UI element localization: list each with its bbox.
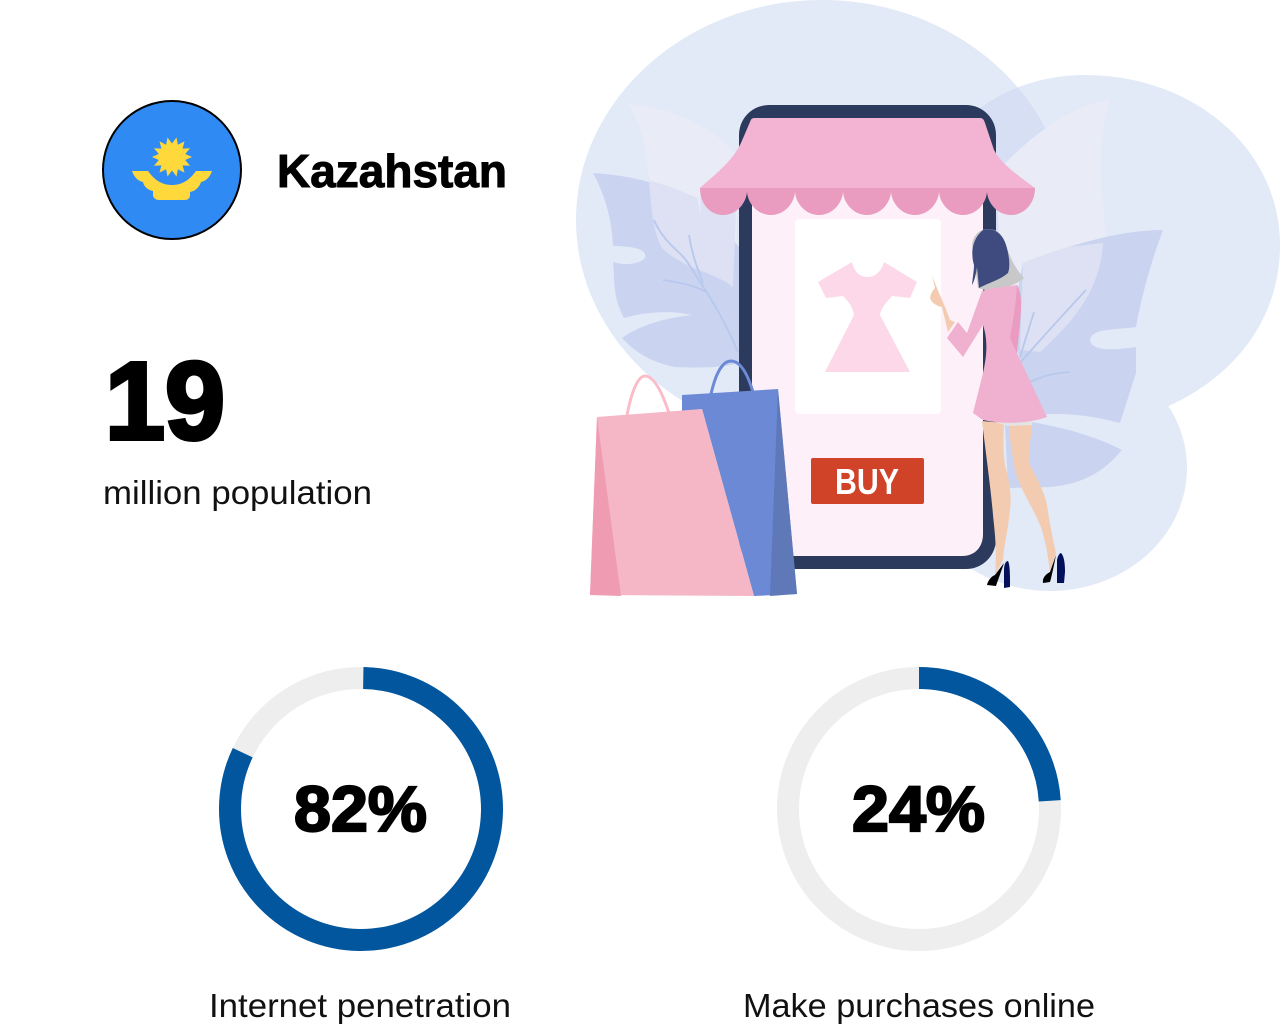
leaf: top left translucent [627, 104, 738, 290]
leaf: right lavender [1010, 230, 1163, 423]
slip [983, 418, 1033, 426]
leaf: lower right lavender [1005, 422, 1122, 488]
hair back [972, 229, 1024, 290]
panel: country header [103, 101, 507, 239]
product card [795, 219, 941, 414]
value: 82%: 82% [294, 773, 427, 845]
shopping bag: pink [590, 376, 754, 596]
awning [700, 118, 1035, 215]
icon: dress [818, 262, 917, 372]
chart: internet penetration donut [209, 676, 511, 1024]
chart: online purchases donut [743, 678, 1095, 1024]
leaf: right overlap [1020, 243, 1103, 352]
buy button [811, 458, 924, 504]
shoes [1004, 561, 1010, 588]
hair [972, 229, 1009, 288]
buy button: BUY [835, 461, 899, 502]
label: internet penetration: Internet penetration [209, 987, 511, 1024]
population number: 19 [105, 340, 225, 463]
icon: Kazakhstan flag [103, 101, 241, 239]
value: 24%: 24% [852, 773, 985, 845]
leaf: left overlap [647, 165, 736, 287]
leaf: left lavender [593, 173, 742, 367]
illustration: online shopping [576, 0, 1280, 596]
label: make purchases online: Make purchases online [743, 987, 1095, 1024]
heading: country name: Kazahstan [277, 145, 507, 197]
leaf veins [654, 220, 1086, 382]
population label: million population [103, 474, 372, 511]
dress [947, 285, 1047, 423]
background blobs [576, 0, 1280, 591]
shopping bag: blue [682, 361, 797, 596]
panel: population stat [103, 340, 372, 511]
woman [930, 229, 1065, 588]
arm [930, 275, 955, 332]
phone [739, 105, 996, 569]
legs [982, 421, 1011, 575]
leaf: top right translucent [996, 99, 1111, 350]
